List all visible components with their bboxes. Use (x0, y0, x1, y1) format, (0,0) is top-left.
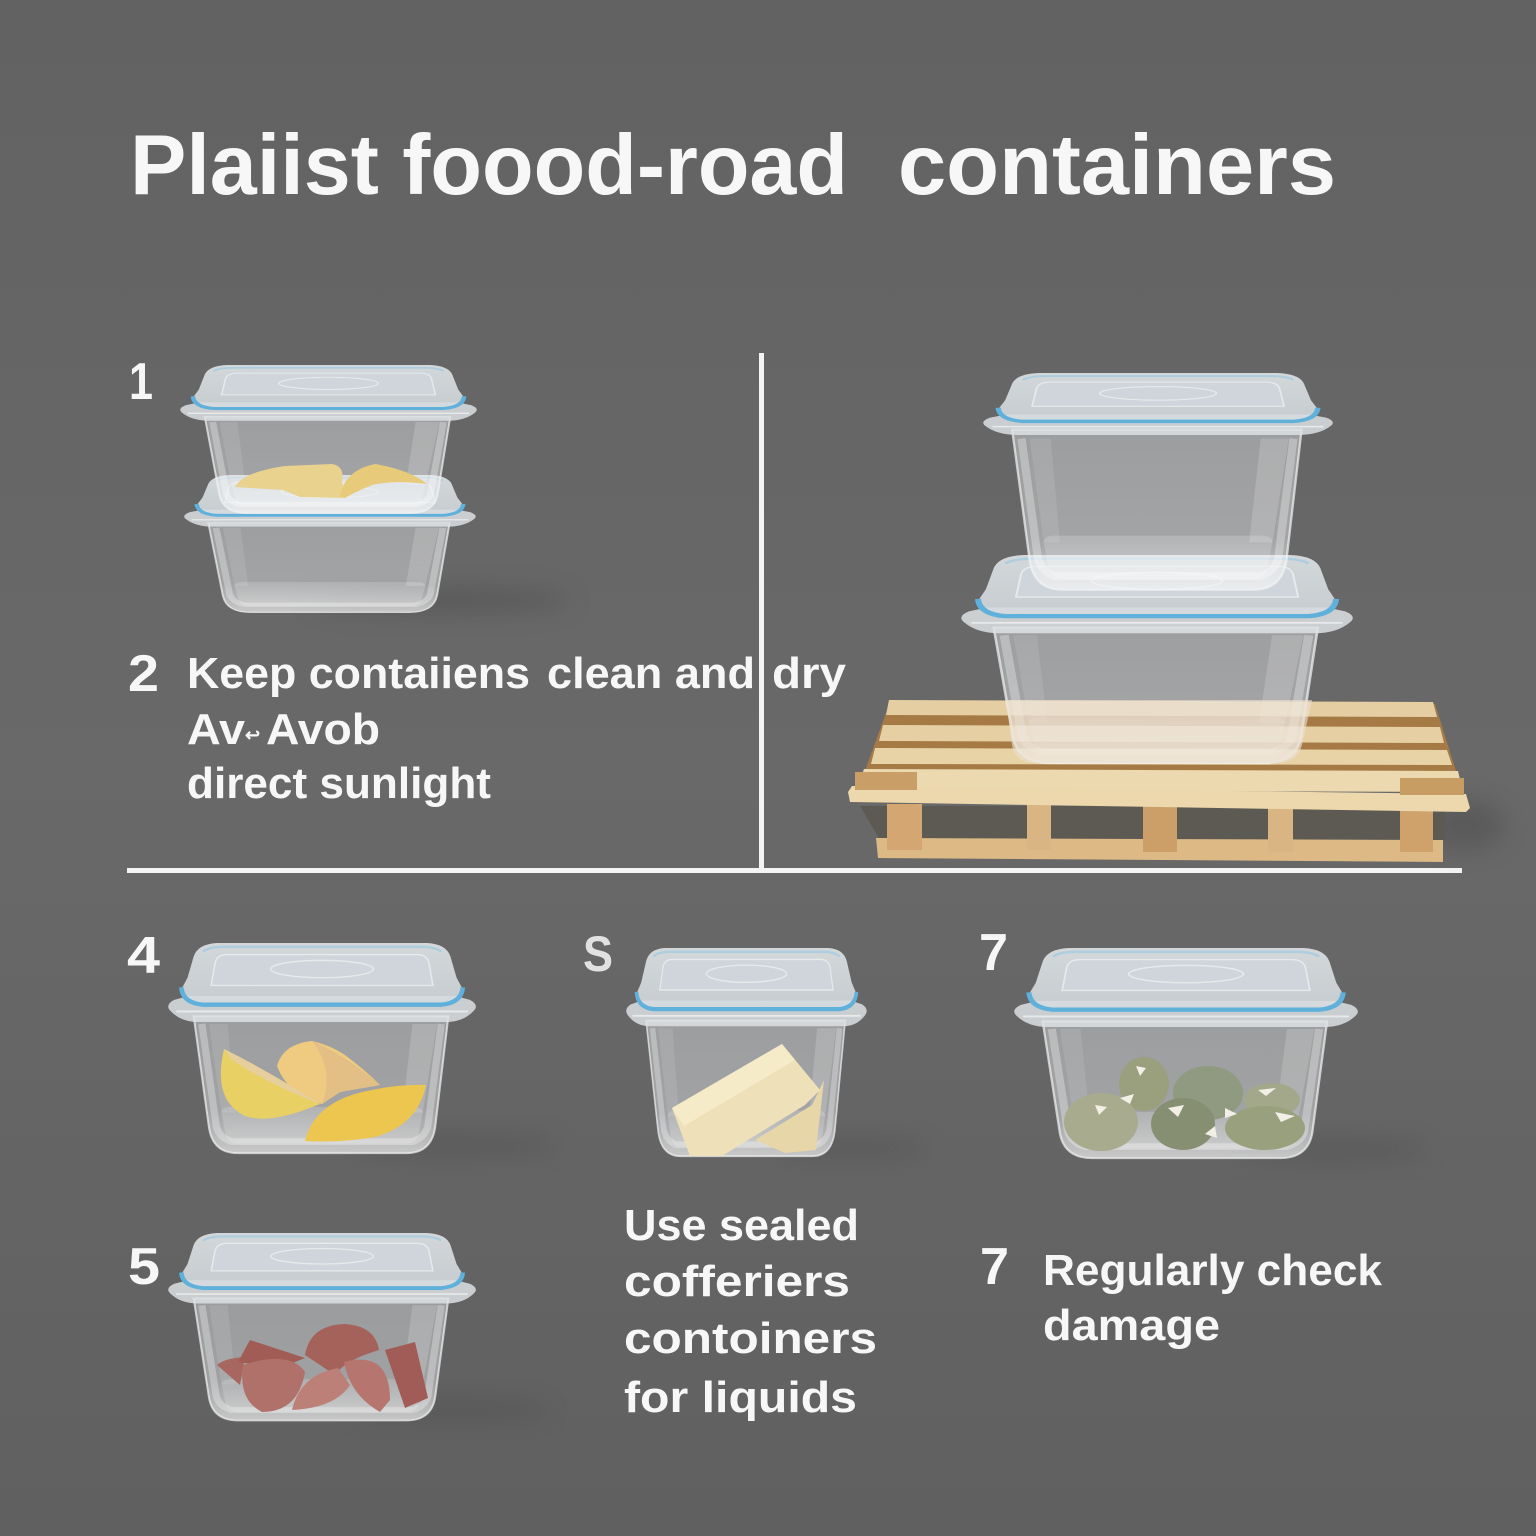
divider: vertical (759, 353, 764, 868)
container with olives (1014, 948, 1430, 1160)
text block: sealed containers: contoiners (624, 1314, 877, 1363)
cheese block (672, 1044, 824, 1156)
title: containers (898, 118, 1336, 213)
text block: sealed containers: for liquids (624, 1373, 857, 1422)
mango slices (221, 1041, 426, 1142)
container stack: step 1 (180, 365, 570, 612)
container with cheese (626, 948, 930, 1157)
text block: sealed containers: Use sealed (624, 1201, 859, 1250)
olives (1064, 1057, 1305, 1151)
title: Plaiist foood-road (130, 118, 848, 213)
text block: step 2: Av (187, 705, 246, 754)
text block: step 2: ↩ (245, 725, 260, 745)
container with mango slices (168, 943, 560, 1155)
text block: regularly check (1043, 1246, 1383, 1350)
step 7 number (top): 7 (979, 924, 1008, 982)
step 7 number (bottom): 7 (980, 1238, 1009, 1296)
step 2 number: 2 (128, 645, 159, 703)
text block: step 2: clean and (547, 649, 755, 698)
text block: regularly check: damage (1043, 1301, 1220, 1350)
wooden pallet (848, 700, 1505, 862)
title (130, 118, 1336, 213)
container with sliced meat (168, 1233, 550, 1420)
text block: sealed containers (624, 1201, 877, 1422)
meat slices (217, 1324, 428, 1412)
step 1 number: 1 (129, 353, 153, 411)
large container stack (961, 373, 1353, 763)
step 4 number: 4 (127, 927, 160, 985)
text block: regularly check: Regularly check (1043, 1246, 1383, 1295)
text block: step 2 (187, 649, 847, 808)
divider: horizontal (127, 868, 1462, 873)
text block: step 2: Avob (266, 705, 380, 754)
text block: step 2: dry (772, 649, 847, 698)
text block: step 2: direct sunlight (187, 759, 491, 808)
text block: step 2: Keep contaiiens (187, 649, 530, 698)
step 5 number: 5 (128, 1238, 160, 1296)
step 3 number: S (583, 926, 613, 982)
text block: sealed containers: cofferiers (624, 1257, 850, 1306)
legs and lower frame (860, 806, 1445, 840)
